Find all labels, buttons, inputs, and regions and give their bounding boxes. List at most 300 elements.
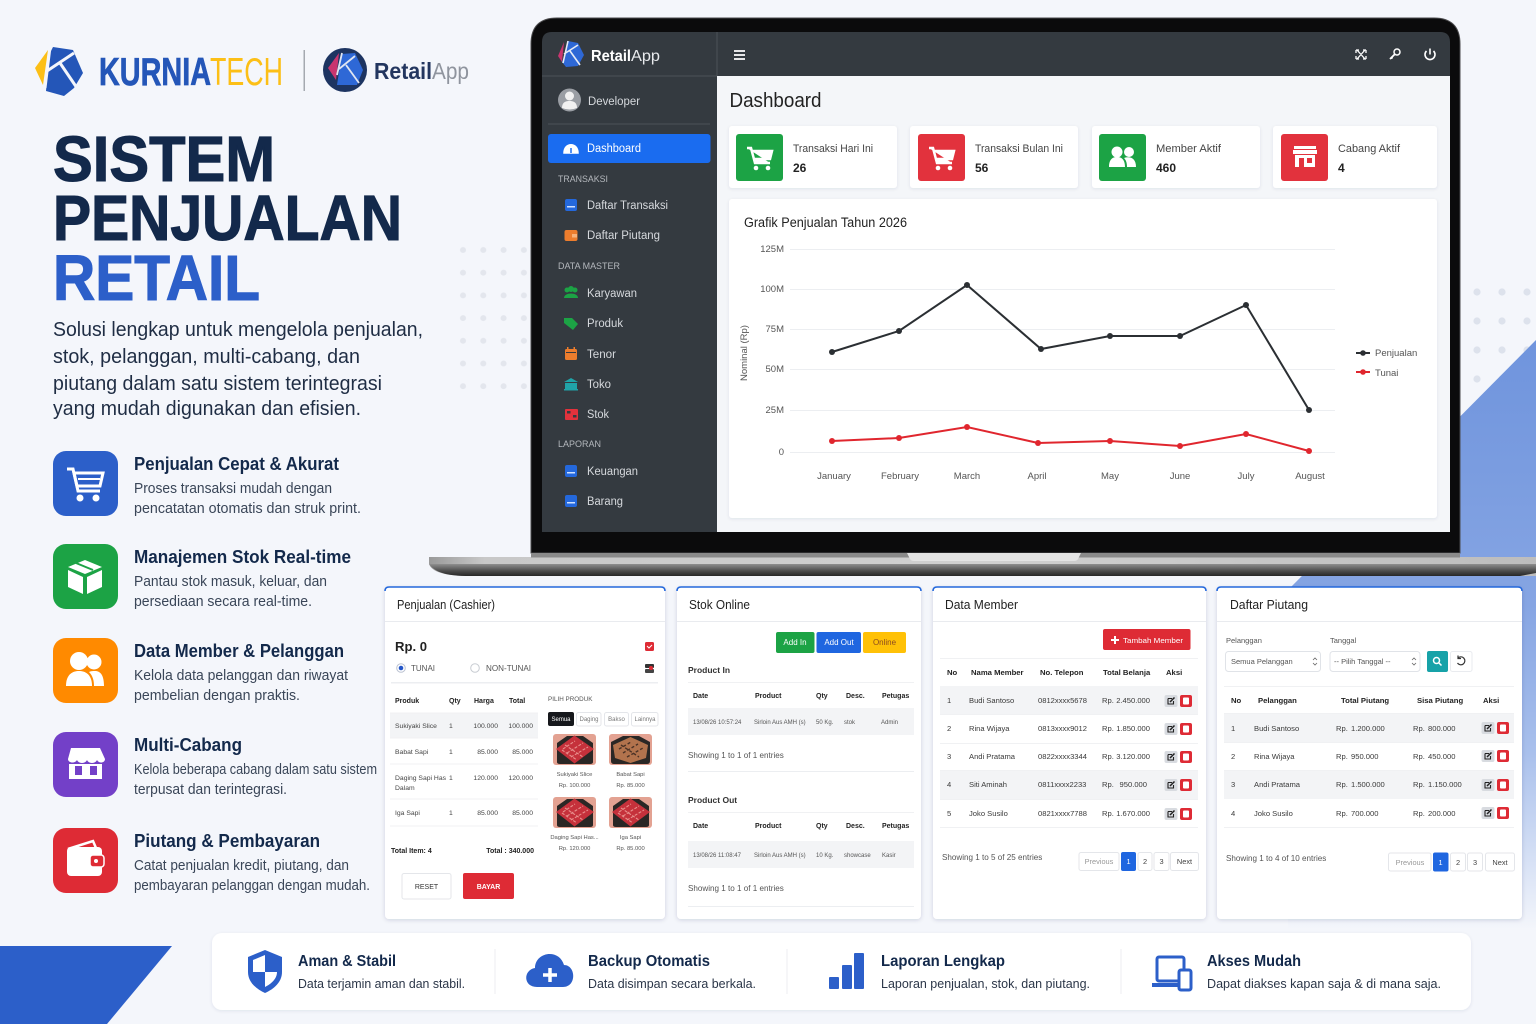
button: Bayar bbox=[463, 873, 514, 899]
feature: Data Member & Pelanggan: Kelola data pelanggan dan riwayat bbox=[134, 668, 348, 684]
cashier table: 85.000 bbox=[512, 810, 533, 817]
row 2: Rp. bbox=[1336, 752, 1348, 761]
member table: No. Telepon bbox=[1040, 668, 1084, 677]
row 3: Rp. bbox=[1102, 752, 1114, 761]
piutang table: Aksi bbox=[1483, 696, 1499, 705]
cashier table: Sukiyaki Slice bbox=[395, 723, 437, 730]
product picker: Lainnya bbox=[634, 717, 656, 723]
icon: box bbox=[53, 544, 118, 609]
stat: Cabang Aktif: Cabang Aktif bbox=[1338, 143, 1401, 155]
table: Product In: Product In bbox=[688, 665, 730, 675]
description: yang mudah digunakan dan efisien. bbox=[53, 398, 361, 420]
piutang table: Total Piutang bbox=[1341, 696, 1389, 705]
payment options bbox=[397, 663, 531, 673]
row 1: 1.200.000 bbox=[1351, 724, 1385, 733]
cashier totals bbox=[391, 848, 534, 855]
entries info: Showing 1 to 4 of 10 entries bbox=[1226, 854, 1326, 863]
row 1 bbox=[947, 695, 1192, 707]
table: Product In bbox=[688, 665, 914, 772]
row 1: Budi Santoso bbox=[1254, 724, 1299, 733]
feature: Data Member & Pelanggan bbox=[53, 638, 348, 704]
pagination: 2 bbox=[1143, 857, 1147, 866]
cashier totals: Total : 340.000 bbox=[486, 848, 534, 855]
row 4: 950.000 bbox=[1120, 780, 1147, 789]
stock buttons bbox=[776, 632, 906, 653]
row 3: 3 bbox=[1231, 780, 1235, 789]
page heading: Dashboard bbox=[730, 90, 822, 112]
row 1: Rp. bbox=[1336, 724, 1348, 733]
piutang table: Sisa Piutang bbox=[1417, 696, 1463, 705]
sidebar brand: Retail bbox=[591, 48, 631, 65]
feature list bbox=[53, 451, 377, 894]
table: Product Out: Product Out bbox=[688, 795, 737, 805]
logo: KurniaTech bbox=[35, 47, 283, 96]
member table: Nama Member bbox=[971, 668, 1024, 677]
row 2 bbox=[1231, 750, 1509, 762]
stat: Transaksi Hari Ini bbox=[729, 126, 897, 188]
feature: Multi-Cabang bbox=[53, 732, 377, 798]
row 5: Joko Susilo bbox=[969, 809, 1008, 818]
menu: Karyawan: Karyawan bbox=[587, 288, 637, 300]
cashier table: Total bbox=[509, 698, 525, 705]
menu: Keuangan: Keuangan bbox=[587, 466, 638, 478]
row 1: 2.450.000 bbox=[1116, 696, 1150, 705]
filter form: Tanggal bbox=[1330, 636, 1357, 645]
menu: Daftar Transaksi: Daftar Transaksi bbox=[587, 200, 668, 212]
row 2: 450.000 bbox=[1428, 752, 1455, 761]
row 5: Rp. bbox=[1102, 809, 1114, 818]
cashier table: 1 bbox=[449, 810, 453, 817]
feature: Multi-Cabang: Multi-Cabang bbox=[134, 735, 242, 755]
bottom benefits bar bbox=[212, 933, 1471, 1010]
payment options: NON-TUNAI bbox=[486, 663, 531, 673]
piutang table: No bbox=[1231, 696, 1242, 705]
table: Product In: 50 Kg. bbox=[816, 720, 834, 726]
row 2: Rp. bbox=[1413, 752, 1425, 761]
cashier table: Iga Sapi bbox=[395, 810, 420, 817]
button: Reset bbox=[402, 874, 451, 899]
cashier table: Dalam bbox=[395, 785, 415, 792]
icon: store bbox=[53, 732, 118, 797]
benefit: Laporan Lengkap: Laporan Lengkap bbox=[881, 953, 1005, 970]
cashier table: 85.000 bbox=[512, 749, 533, 756]
row 1: Budi Santoso bbox=[969, 696, 1014, 705]
member table: No bbox=[947, 668, 958, 677]
row 4 bbox=[947, 779, 1192, 791]
feature: Data Member & Pelanggan: pembelian dengan praktis. bbox=[134, 688, 300, 704]
feature: Manajemen Stok Real-time: Manajemen Stok Real-time bbox=[134, 547, 351, 567]
title bbox=[53, 123, 402, 314]
benefit: Akses Mudah bbox=[1152, 953, 1441, 991]
pagination: 3 bbox=[1159, 857, 1164, 866]
table: Product Out bbox=[688, 795, 914, 906]
product: Sukiyaki Slice: Sukiyaki Slice bbox=[557, 772, 592, 778]
feature: Piutang & Pembayaran bbox=[53, 828, 370, 894]
pagination: Previous bbox=[1085, 857, 1114, 866]
x axis labels: April bbox=[1027, 471, 1047, 482]
pagination: 3 bbox=[1473, 858, 1477, 867]
menu: Keuangan bbox=[565, 465, 638, 478]
icon: bar chart bbox=[829, 953, 864, 989]
description: stok, pelanggan, multi-cabang, dan bbox=[53, 346, 360, 368]
row 2: 950.000 bbox=[1351, 752, 1378, 761]
row 4: 4 bbox=[947, 780, 951, 789]
row 3: 1.500.000 bbox=[1351, 780, 1385, 789]
row 3 bbox=[947, 751, 1192, 763]
row 5: 0821xxxx7788 bbox=[1038, 809, 1087, 818]
y axis labels: 25M bbox=[766, 405, 784, 416]
x axis labels: January bbox=[817, 471, 851, 482]
user panel bbox=[558, 88, 640, 112]
row 1 bbox=[1231, 722, 1509, 734]
product picker: Daging bbox=[579, 717, 599, 723]
stock buttons: Online bbox=[873, 638, 897, 647]
active menu: Dashboard bbox=[548, 134, 710, 163]
row 1: 800.000 bbox=[1428, 724, 1455, 733]
stock buttons: Add Out bbox=[824, 638, 854, 647]
table: Product In: Admin bbox=[881, 720, 898, 726]
product picker: Bakso bbox=[608, 717, 625, 723]
description: Solusi lengkap untuk mengelola penjualan, bbox=[53, 319, 423, 341]
table: Product Out: showcase bbox=[844, 853, 871, 859]
decorative blue shape bottom left bbox=[0, 946, 172, 1024]
table: Product In: stok bbox=[844, 720, 856, 726]
feature: Multi-Cabang: terpusat dan terintegrasi. bbox=[134, 782, 287, 798]
table: Product Out: Kasir bbox=[882, 853, 896, 859]
product: Sukiyaki Slice: Rp. 100.000 bbox=[559, 783, 590, 789]
feature: Piutang & Pembayaran: Catat penjualan kredit, piutang, dan bbox=[134, 858, 349, 874]
button: Bayar: BAYAR bbox=[477, 884, 500, 891]
stat: Cabang Aktif bbox=[1273, 126, 1437, 188]
panel: Stok Online bbox=[677, 587, 921, 919]
sidebar brand: App bbox=[631, 48, 660, 65]
laptop bezel bbox=[531, 18, 1460, 553]
row 3: 1.150.000 bbox=[1428, 780, 1462, 789]
logo: RetailApp: App bbox=[432, 58, 469, 84]
cashier table: Daging Sapi Has bbox=[395, 775, 447, 782]
x axis labels: March bbox=[954, 471, 980, 482]
row 3: Andi Pratama bbox=[1254, 780, 1301, 789]
cashier icons bbox=[645, 642, 654, 673]
benefit: Aman & Stabil: Aman & Stabil bbox=[298, 953, 396, 970]
cashier table: Qty bbox=[449, 698, 461, 705]
row 3: 3.120.000 bbox=[1116, 752, 1150, 761]
pagination bbox=[1388, 852, 1514, 872]
stat: Member Aktif bbox=[1092, 126, 1260, 188]
cashier totals: Total Item: 4 bbox=[391, 848, 432, 855]
x axis labels: February bbox=[881, 471, 919, 482]
table: Product In: Product bbox=[755, 693, 782, 700]
row 4: 0811xxxx2233 bbox=[1038, 780, 1086, 789]
benefit: Aman & Stabil: Data terjamin aman dan stabil. bbox=[298, 977, 465, 991]
x axis labels: July bbox=[1238, 471, 1255, 482]
product: Iga Sapi: Rp. 85.000 bbox=[616, 846, 645, 852]
row 2: 2 bbox=[947, 724, 951, 733]
product: Babat Sapi: Rp. 85.000 bbox=[616, 783, 645, 789]
menu: Toko bbox=[564, 378, 611, 391]
laptop base bbox=[429, 557, 1536, 576]
table: Product Out: Product bbox=[755, 823, 782, 830]
dashboard screen bbox=[542, 32, 1450, 532]
decorative blue triangle right bbox=[1288, 340, 1536, 930]
x axis labels: May bbox=[1101, 471, 1119, 482]
y axis labels: 125M bbox=[760, 244, 784, 255]
member table: Total Belanja bbox=[1103, 668, 1151, 677]
button: Tambah Member: Tambah Member bbox=[1123, 636, 1184, 645]
pagination: 1 bbox=[1438, 858, 1443, 867]
feature: Penjualan Cepat & Akurat: pencatatan otomatis dan struk print. bbox=[134, 501, 361, 517]
stat: Member Aktif: 460 bbox=[1156, 161, 1176, 175]
table: Product Out: 10 Kg. bbox=[816, 853, 834, 859]
menu: Barang: Barang bbox=[587, 496, 623, 508]
benefit: Backup Otomatis: Data disimpan secara berkala. bbox=[588, 977, 756, 991]
wordmark: TECH bbox=[210, 51, 283, 94]
table: Product Out: Petugas bbox=[882, 823, 909, 830]
feature: Data Member & Pelanggan: Data Member & Pelanggan bbox=[134, 641, 344, 661]
panel: Penjualan (Cashier) bbox=[385, 587, 665, 919]
series: Tunai bbox=[829, 424, 1312, 454]
cashier table: 100.000 bbox=[508, 723, 533, 730]
sidebar: TRANSAKSI bbox=[558, 174, 608, 185]
feature: Multi-Cabang: Kelola beberapa cabang dalam satu sistem bbox=[134, 762, 377, 778]
feature: Manajemen Stok Real-time bbox=[53, 544, 351, 610]
row 4: Joko Susilo bbox=[1254, 809, 1293, 818]
row 4: Siti Aminah bbox=[969, 780, 1007, 789]
cashier table: 1 bbox=[449, 749, 453, 756]
button: Tambah Member bbox=[1103, 629, 1190, 650]
row 2: 1.850.000 bbox=[1116, 724, 1150, 733]
chart legend bbox=[1356, 348, 1417, 379]
product: Babat Sapi: Babat Sapi bbox=[616, 772, 645, 778]
row 2: 0813xxxx9012 bbox=[1038, 724, 1087, 733]
menu: Toko: Toko bbox=[587, 379, 611, 391]
table: Product In: Showing 1 to 1 of 1 entries bbox=[688, 751, 784, 760]
panel: Daftar Piutang bbox=[1217, 587, 1522, 919]
row 4: Rp. bbox=[1413, 809, 1425, 818]
user panel: Developer bbox=[588, 96, 640, 108]
stat: Transaksi Hari Ini: 26 bbox=[793, 161, 807, 175]
piutang table bbox=[1224, 686, 1514, 828]
chart legend: Tunai bbox=[1375, 368, 1398, 379]
stat: Transaksi Bulan Ini bbox=[910, 126, 1078, 188]
filter form bbox=[1226, 636, 1472, 672]
benefit: Akses Mudah: Akses Mudah bbox=[1207, 953, 1301, 970]
row 3: Rp. bbox=[1336, 780, 1348, 789]
row 5: 1.670.000 bbox=[1116, 809, 1150, 818]
cashier total: Rp. 0 bbox=[395, 639, 427, 654]
logo: RetailApp: Retail bbox=[374, 58, 432, 84]
cashier table: Harga bbox=[474, 698, 494, 705]
row 3: 0822xxxx3344 bbox=[1038, 752, 1087, 761]
table: Product Out: Showing 1 to 1 of 1 entries bbox=[688, 884, 784, 893]
row 3: Rp. bbox=[1413, 780, 1425, 789]
benefit: Backup Otomatis: Backup Otomatis bbox=[588, 953, 710, 970]
stat: Transaksi Bulan Ini: Transaksi Bulan Ini bbox=[975, 143, 1063, 155]
icon: people bbox=[53, 638, 118, 703]
feature: Piutang & Pembayaran: pembayaran pelanggan dengan mudah. bbox=[134, 878, 370, 894]
sidebar: LAPORAN bbox=[558, 439, 601, 450]
button: Reset: RESET bbox=[415, 884, 439, 891]
feature: Penjualan Cepat & Akurat bbox=[53, 451, 361, 517]
title: RETAIL bbox=[53, 242, 260, 314]
menu: Tenor: Tenor bbox=[587, 349, 616, 361]
row 3: 3 bbox=[947, 752, 951, 761]
row 1: 0812xxxx5678 bbox=[1038, 696, 1087, 705]
cashier table: 1 bbox=[449, 775, 453, 782]
feature: Penjualan Cepat & Akurat: Penjualan Cepat & Akurat bbox=[134, 454, 339, 474]
chart legend: Penjualan bbox=[1375, 348, 1417, 359]
panel: Penjualan (Cashier): Penjualan (Cashier) bbox=[397, 598, 495, 612]
cashier table: Babat Sapi bbox=[395, 749, 429, 756]
x axis labels: June bbox=[1170, 471, 1190, 482]
row 2: 2 bbox=[1231, 752, 1235, 761]
table: Product Out: Qty bbox=[816, 823, 828, 830]
line chart panel bbox=[729, 199, 1437, 518]
entries info: Showing 1 to 5 of 25 entries bbox=[942, 853, 1042, 862]
logo: RetailApp bbox=[323, 48, 469, 92]
table: Product In: Qty bbox=[816, 693, 828, 700]
product: Babat Sapi bbox=[609, 734, 652, 789]
row 5 bbox=[947, 808, 1192, 820]
product: Daging Sapi Has: Rp. 120.000 bbox=[559, 846, 590, 852]
cashier table bbox=[390, 698, 538, 826]
product picker bbox=[548, 696, 658, 852]
product: Daging Sapi Has: Daging Sapi Has... bbox=[550, 835, 599, 841]
cashier table: 100.000 bbox=[473, 723, 498, 730]
stat: Transaksi Bulan Ini: 56 bbox=[975, 161, 989, 175]
row 1: 1 bbox=[1231, 724, 1235, 733]
benefit: Aman & Stabil bbox=[248, 950, 465, 993]
icon: devices bbox=[1152, 957, 1191, 990]
menu: Produk bbox=[564, 318, 623, 330]
stat: Cabang Aktif: 4 bbox=[1338, 161, 1345, 175]
filter form: Semua Pelanggan bbox=[1231, 657, 1293, 666]
panel: Data Member bbox=[933, 587, 1206, 919]
row 2 bbox=[947, 723, 1192, 735]
pagination bbox=[1079, 852, 1198, 871]
sidebar bbox=[548, 41, 710, 508]
icon: shield bbox=[248, 950, 282, 993]
row 1: Rp. bbox=[1102, 696, 1114, 705]
table: Product Out: 13/08/26 11:08:47 bbox=[693, 853, 742, 859]
laptop bbox=[429, 18, 1536, 576]
row 4 bbox=[1231, 807, 1509, 819]
icon: wallet bbox=[53, 828, 118, 893]
row 4: Rp. bbox=[1102, 780, 1114, 789]
menu: Barang bbox=[565, 495, 623, 508]
y axis labels: 100M bbox=[760, 284, 784, 295]
navbar icons bbox=[734, 48, 1435, 60]
member table bbox=[940, 658, 1198, 828]
row 4: Rp. bbox=[1336, 809, 1348, 818]
panel: Data Member: Data Member bbox=[945, 598, 1018, 612]
title: SISTEM bbox=[53, 123, 275, 195]
description: piutang dalam satu sistem terintegrasi bbox=[53, 373, 382, 395]
row 1: 1 bbox=[947, 696, 951, 705]
cashier table: 120.000 bbox=[473, 775, 498, 782]
table: Product Out: Date bbox=[693, 823, 708, 830]
row 4: 4 bbox=[1231, 809, 1235, 818]
description bbox=[53, 319, 423, 420]
table: Product In: Sirloin Aus AMH (s) bbox=[754, 720, 806, 726]
product: Daging Sapi Has bbox=[550, 797, 599, 852]
payment options: TUNAI bbox=[411, 663, 435, 673]
piutang table: Pelanggan bbox=[1258, 696, 1297, 705]
y axis labels: 75M bbox=[766, 324, 784, 335]
sidebar brand bbox=[558, 41, 660, 67]
product: Sukiyaki Slice bbox=[553, 734, 596, 789]
panel: Stok Online: Stok Online bbox=[689, 598, 750, 612]
benefit: Akses Mudah: Dapat diakses kapan saja & di mana saja. bbox=[1207, 977, 1441, 991]
benefit: Backup Otomatis bbox=[526, 953, 756, 991]
stock buttons: Add In bbox=[783, 638, 807, 647]
table: Product Out: Desc. bbox=[846, 823, 865, 830]
pagination: 1 bbox=[1126, 857, 1131, 866]
series: Penjualan bbox=[829, 282, 1312, 413]
row 2: Rina Wijaya bbox=[1254, 752, 1295, 761]
product picker: Semua bbox=[551, 717, 571, 723]
stat: Member Aktif: Member Aktif bbox=[1156, 143, 1222, 155]
row 3 bbox=[1231, 779, 1509, 791]
x axis labels: August bbox=[1295, 471, 1325, 482]
benefit: Laporan Lengkap bbox=[829, 953, 1090, 991]
product: Iga Sapi: Iga Sapi bbox=[620, 835, 641, 841]
feature: Penjualan Cepat & Akurat: Proses transaksi mudah dengan bbox=[134, 481, 332, 497]
y axis labels: 50M bbox=[766, 364, 784, 375]
icon: KurniaTech mark bbox=[35, 47, 83, 96]
row 4: 200.000 bbox=[1428, 809, 1455, 818]
table: Product In: Petugas bbox=[882, 693, 909, 700]
icon: cloud plus bbox=[526, 954, 573, 987]
table: Product In: Date bbox=[693, 693, 708, 700]
y axis labels bbox=[760, 244, 784, 458]
row 1: Rp. bbox=[1413, 724, 1425, 733]
pagination: Next bbox=[1492, 858, 1508, 867]
stat: Transaksi Hari Ini: Transaksi Hari Ini bbox=[793, 143, 873, 155]
pagination: 2 bbox=[1456, 858, 1460, 867]
cashier table: 1 bbox=[449, 723, 453, 730]
active menu: Dashboard: Dashboard bbox=[587, 143, 641, 155]
laptop notch bbox=[907, 553, 1081, 561]
x axis labels bbox=[817, 471, 1325, 482]
menu: Karyawan bbox=[564, 286, 637, 300]
menu: Stok: Stok bbox=[587, 409, 609, 421]
pagination: Next bbox=[1177, 857, 1192, 866]
table: Product Out: Sirloin Aus AMH (s) bbox=[754, 853, 806, 859]
product: Iga Sapi bbox=[609, 797, 652, 852]
icon: cart bbox=[53, 451, 118, 516]
wordmark: KURNIA bbox=[99, 51, 211, 94]
panel: Daftar Piutang: Daftar Piutang bbox=[1230, 598, 1308, 612]
stat cards bbox=[729, 126, 1437, 188]
sidebar: DATA MASTER bbox=[558, 261, 620, 272]
row 2: Rina Wijaya bbox=[969, 724, 1010, 733]
row 3: Andi Pratama bbox=[969, 752, 1016, 761]
cashier table: 120.000 bbox=[508, 775, 533, 782]
menu: Stok bbox=[565, 409, 609, 421]
row 2: Rp. bbox=[1102, 724, 1114, 733]
feature: Manajemen Stok Real-time: persediaan secara real-time. bbox=[134, 594, 312, 610]
row 4: 700.000 bbox=[1351, 809, 1378, 818]
feature: Piutang & Pembayaran: Piutang & Pembayaran bbox=[134, 831, 320, 851]
benefit: Laporan Lengkap: Laporan penjualan, stok, dan piutang. bbox=[881, 977, 1090, 991]
title: PENJUALAN bbox=[53, 182, 402, 254]
menu: Daftar Piutang: Daftar Piutang bbox=[587, 230, 660, 242]
filter form: Pelanggan bbox=[1226, 636, 1262, 645]
table: Product In: 13/08/26 10:57:24 bbox=[693, 720, 742, 726]
member table: Aksi bbox=[1166, 668, 1182, 677]
filter form: -- Pilih Tanggal -- bbox=[1334, 657, 1391, 666]
